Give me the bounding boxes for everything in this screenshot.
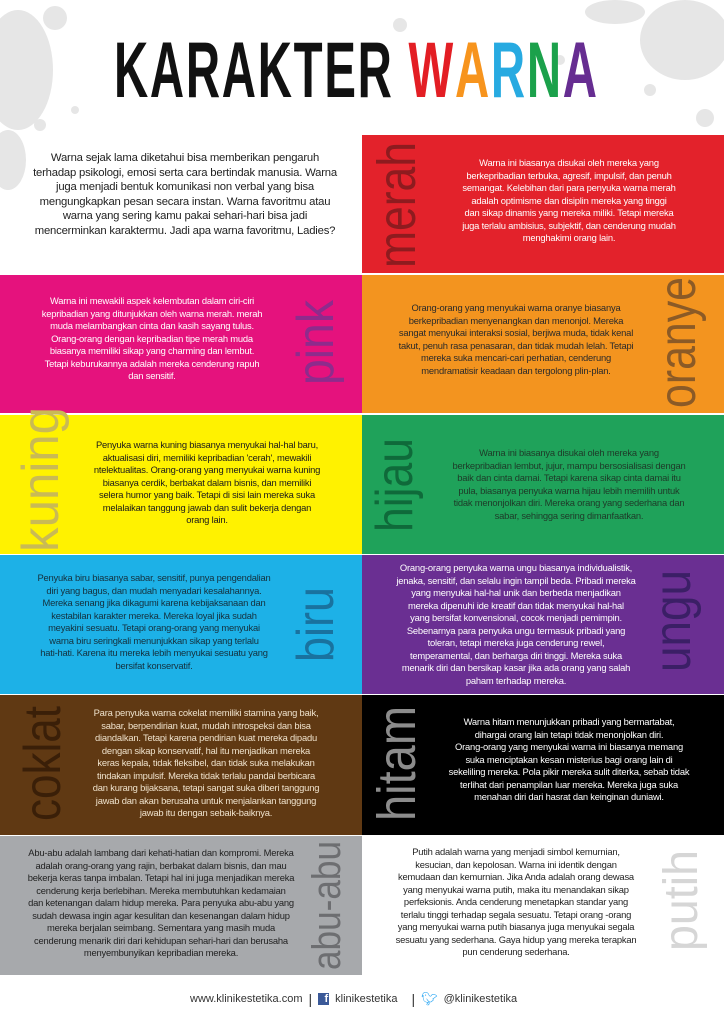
text: coklat: dan kurang bijaksana, tetapi sangat suka diberi tanggung [93,782,319,793]
panel: hitam [362,695,724,835]
text: oranye [398,302,633,376]
text: pink: biasanya memiliki sikap yang charming dan lembut. [50,345,254,356]
text: oranye: takut, penuh rasa penasaran, dan tidak mudah lelah. Tetapi [399,340,633,350]
text: hijau: tidak menonjolkan diri. Mereka orang yang sederhana dan [454,497,684,508]
panel: oranye [362,275,724,413]
label: merah: merah [367,142,427,268]
text: ungu: jenaka, sensitif, dan selalu ingin tampil beda. Pribadi mereka [396,574,636,586]
text: ungu: Orang-orang penyuka warna ungu biasanya individualistik, [400,562,632,573]
text: abu-abu: mereka berjalan seimbang. Sementara yang masih muda [47,922,275,933]
text: ungu: mereka dipenuhi ide kreatif dan tidak menyukai hal-hal [408,600,624,610]
text: abu-abu: adalah orang-orang yang rajin, berbakat dalam bisnis, dan mau [35,860,286,870]
text: putih: kemudaan dan kemurnian. Jika Anda adalah orang dewasa [398,871,634,882]
text: coklat: Para penyuka warna cokelat memiliki stamina yang baik, [94,707,318,718]
text: putih: pun cenderung sederhana. [462,946,570,957]
intro text: mencerminkan karaktermu. Jadi apa warna favoritmu, Ladies? [35,225,335,237]
text: coklat: sabar, berpendirian kuat, mudah introspeksi dan bisa [101,720,311,730]
text: pink: Tetapi keburukannya adalah mereka cenderung rapuh [45,358,259,368]
text: merah: Warna ini biasanya disukai oleh mereka yang [479,157,659,168]
text: merah: adalah optimisme dan disiplin mereka yang tinggi [471,194,667,206]
text: hitam: menahan diri dari hasrat dan keinginan duniawi. [474,791,664,802]
text: hitam: dihargai orang lain tetapi tidak menonjolkan diri. [475,728,663,740]
text: pink: dan sensitif. [128,370,176,381]
text: biru: hati-hati. Karena itu mereka lebih menyukai sesuatu yang [40,647,268,658]
text: hitam: terlihat dari penampilan luar mereka. Mereka juga suka [460,778,678,790]
text: oranye: mendramatisir keadaan dan tergolong plin-plan. [421,364,611,376]
footer [190,991,518,1007]
text: abu-abu: cenderung menarik diri dari kehidupan sehari-hari dan berusaha [34,934,288,946]
panel: abu-abu [0,836,362,975]
text: abu-abu: bekerja keras tanpa imbalan. Tetapi hal ini juga menjadikan mereka [28,872,294,883]
text: kuning: aktualisasi diri, memiliki kepribadian 'cerah', mewakili [103,452,311,462]
text: ungu: Sebenarnya para penyuka ungu termasuk pribadi yang [407,624,625,636]
text: hitam: suka menciptakan kesan misterius bagi orang lain di [465,754,673,764]
text: biru: kestabilan karakter mereka. Mereka loyal jika sudah [51,610,257,620]
panel: hijau [362,415,724,554]
text: putih [396,846,636,957]
text: hitam: sekeliling mereka. Pola pikir mereka sulit diterka, sebab tidak [449,766,689,777]
text: ungu: toleran, tetapi mereka juga cenderung rewel, [428,637,604,648]
text: abu-abu: Abu-abu adalah lambang dari kehati-hatian dan kompromi. Mereka [28,847,294,858]
text: abu-abu [28,847,294,958]
text: coklat: tindakan impulsif. Mereka tidak terlalu pandai berbicara [97,770,315,780]
title: KARAKTER WARNA [114,25,597,114]
text: pink [42,295,262,381]
text: kuning: Penyuka warna kuning biasanya menyukai hal-hal baru, [96,439,318,450]
text: kuning: melalaikan tanggung jawab dan sulit bekerja dengan [103,502,311,512]
panel: biru [0,555,362,694]
text: hijau: sabar, sehingga sering dimanfaatkan. [495,510,643,520]
text: merah [462,157,676,243]
label: kuning: kuning [12,407,70,552]
label: abu-abu: abu-abu [305,841,349,970]
text: coklat: jawab itu dengan sebaik-baiknya. [140,807,272,818]
panel: kuning [0,415,362,554]
text: oranye: sangat menyukai interaksi sosial, berjiwa muda, tidak kenal [399,327,633,338]
text: merah: dan sikap dinamis yang mereka miliki. Tetapi mereka [464,207,674,218]
panel: pink [0,275,362,413]
text: coklat: keras kepala, tidak fleksibel, dan tidak suka melakukan [97,757,315,768]
intro text: Warna sejak lama diketahui bisa memberikan pengaruh [51,152,319,164]
footer: @klinikestetika [444,993,517,1005]
text: biru: Mereka senang jika dikagumi karena kebijaksanaan dan [42,597,266,608]
text: pink: Warna ini mewakili aspek kelembutan dalam ciri-ciri [50,295,254,306]
text: coklat: jawab dan akan berusaha untuk menjalankan tanggung [96,794,316,806]
text: hijau: Warna ini biasanya disukai oleh mereka yang [479,447,659,458]
panel: coklat [0,695,362,835]
text: putih: terlalu tinggi terhadap segala sesuatu. Tetapi orang -orang [401,908,631,920]
text: pink: Orang-orang dengan kepribadian tipe merah muda [51,332,253,344]
text: hitam: Orang-orang yang menyukai warna ini biasanya memang [455,741,683,752]
text: oranye: Orang-orang yang menyukai warna oranye biasanya [412,302,620,313]
label: pink: pink [287,299,345,385]
label: hijau: hijau [366,438,424,532]
text: coklat: diandalkan. Tetapi karena pendirian kuat mereka dipadu [95,732,317,743]
footer: | [308,991,312,1007]
label: oranye: oranye [649,277,707,408]
text: merah: semangat. Kelebihan dari para penyuka warna merah [462,182,676,193]
text: hijau: baik dan cinta damai. Tetapi karena sikap cinta damai itu [457,472,681,483]
panel: merah [362,135,724,273]
label: putih: putih [655,850,708,951]
text: putih: yang menyukai warna putih, maka itu menandakan sikap [403,884,629,894]
text: hitam: Warna hitam menunjukkan pribadi yang bermartabat, [464,716,674,727]
text: putih: perfeksionis. Anda cenderung menetapkan standar yang [404,896,628,907]
text: kuning: selera humor yang baik. Tetapi di sisi lain mereka suka [99,489,315,500]
panel: ungu [362,555,724,694]
text: putih: Putih adalah warna yang menjadi simbol kemurnian, [412,846,620,857]
text: putih: kesucian, dan kepolosan. Warna ini identik dengan [415,858,617,870]
label: coklat: coklat [14,706,72,821]
text: abu-abu: cenderung kerja berlebihan. Mereka membutuhkan kedamaian [36,884,286,896]
text: putih: yang menyukai warna putih biasanya juga menyukai segala [398,921,634,932]
text: abu-abu: dan ketenangan dalam hidup mereka. Para penyuka abu-abu yang [28,897,294,908]
intro text: terhadap psikologi, emosi serta cara bertindak manusia. Warna [33,167,337,179]
text: hijau: pula, biasanya penyuka warna hijau lebih memilih untuk [458,484,680,496]
text: pink: kepribadian yang ditunjukkan oleh warna merah. merah [42,308,262,318]
icon: twitter: 🐦︎ [421,991,438,1006]
text: merah: juga terlalu ambisius, subjektif, dan cenderung mudah [462,220,676,230]
text: ungu: yang bersifat konvensional, cocok menjadi pemimpin. [410,612,622,623]
text: merah: menghakimi orang lain. [523,232,615,243]
text: coklat: dengan sikap konservatif, hal itu menjadikan mereka [102,744,310,756]
text: ungu: yang menyukai hal-hal unik dan berbeda menjadikan [411,587,621,598]
text: ungu: temperamental, dan berharga diri tinggi. Mereka suka [410,650,622,660]
text: ungu: menarik diri dan bersikap kasar jika ada orang yang salah [402,662,630,673]
label: hitam: hitam [367,706,427,821]
label: biru: biru [287,587,345,662]
text: kuning: ntelektualitas. Orang-orang yang menyukai warna kuning [94,464,320,475]
intro text: mengungkapkan pesan secara instan. Warna favoritmu atau [40,196,330,208]
text: oranye: berkepribadian menyenangkan dan menonjol. Mereka [409,314,623,326]
text: pink: muda melambangkan cinta dan kasih sayang tulus. [50,320,254,331]
icon: facebook [318,993,329,1005]
text: ungu [396,562,636,686]
footer: | [411,991,415,1007]
intro text: warna yang sering kamu pakai sehari-hari bisa jadi [63,210,307,222]
intro text [33,152,338,237]
text: kuning [94,439,320,525]
text: kuning: biasanya cerdik, berbakat dalam bisnis, dan memiliki [103,476,311,488]
text: putih: sesuatu yang sederhana. Gaya hidup yang mereka terapkan [396,934,636,944]
footer: www.klinikestetika.com [190,993,302,1005]
text: hitam [448,716,690,802]
text: biru: diri yang bagus, dan mudah menyadari kesalahannya. [46,584,262,596]
text: coklat [93,707,319,818]
intro text: juga menjadi bentuk komunikasi non verbal yang bisa [56,181,314,193]
text: abu-abu: menyembunyikan kepribadian mereka. [84,947,238,958]
text: oranye: mereka suka mencari-cari perhatian, cenderung [421,352,611,363]
text: biru: meyakini sesuatu. Tetapi orang-orang yang menyukai [48,622,260,633]
text: biru: Penyuka biru biasanya sabar, sensitif, punya pengendalian [37,572,271,583]
label: ungu: ungu [644,570,702,672]
text: biru: bersifat konservatif. [115,660,193,670]
text: ungu: paham terhadap mereka. [466,674,566,686]
footer: klinikestetika [335,993,397,1005]
text: hijau: berkepribadian lembut, jujur, mampu bersosialisasi dengan [452,460,686,470]
text: merah: berkepribadian terbuka, agresif, impulsif, dan penuh [466,170,672,180]
text: hijau [452,447,686,521]
text: kuning: orang lain. [186,514,228,525]
icon: facebook: f [324,993,328,1005]
text: biru: warna biru seringkali menunjukkan sikap yang terlalu [49,634,259,646]
text: biru [37,572,271,670]
text: abu-abu: sudah dewasa ingin agar kesulitan dan kesenangan dalam hidup [32,910,290,920]
